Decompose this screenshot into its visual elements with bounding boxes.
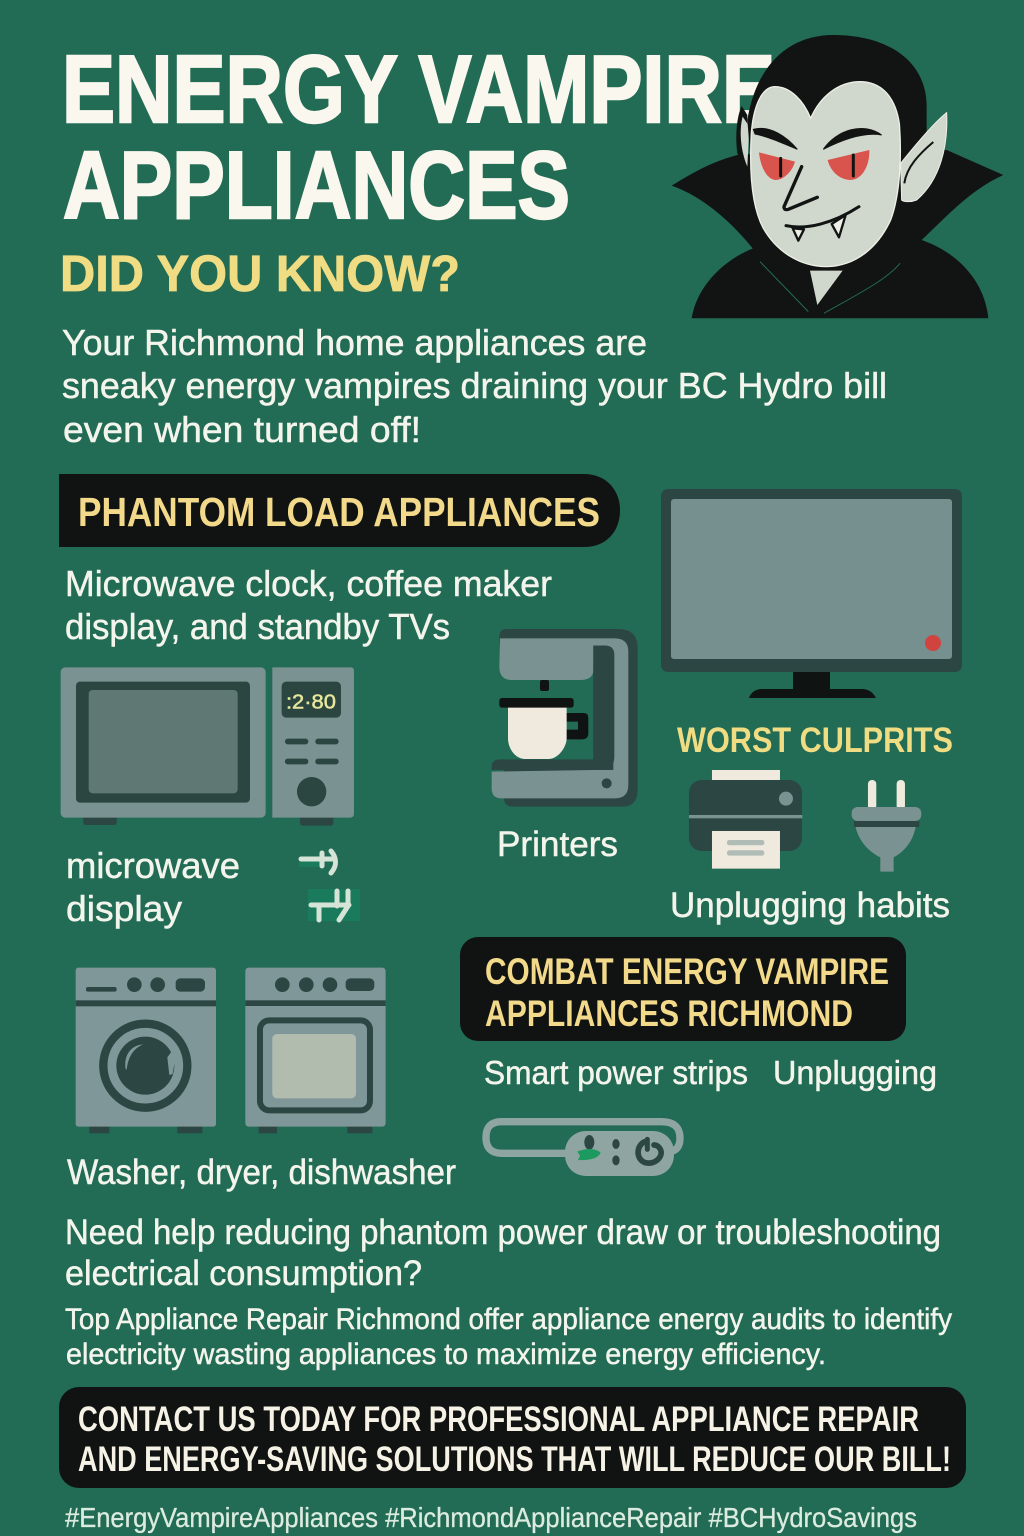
label: printers: Printers: [497, 825, 618, 864]
phantom load description: Microwave clock, coffee maker: [65, 563, 552, 604]
title: APPLIANCES: [63, 132, 570, 239]
label: unplugging habits: Unplugging habits: [670, 886, 950, 925]
microwave display label: microwave: [66, 845, 240, 886]
icon: printer: [689, 770, 802, 869]
title: [62, 36, 775, 239]
help question: Need help reducing phantom power draw or troubleshooting: [65, 1213, 941, 1252]
phantom load description: [65, 563, 552, 647]
service description: Top Appliance Repair Richmond offer appliance energy audits to identify: [65, 1303, 952, 1336]
phantom load description: display, and standby TVs: [65, 606, 450, 647]
icon: vampire: [672, 35, 1003, 318]
title: ENERGY VAMPIRE: [62, 36, 775, 143]
combat tips: Smart power strips: [484, 1054, 748, 1091]
icon: dryer: [245, 968, 386, 1133]
heading: did you know: DID YOU KNOW?: [60, 245, 460, 302]
icon: television: [661, 489, 962, 698]
intro text: even when turned off!: [63, 409, 421, 450]
panel: contact call to action: [59, 1387, 966, 1488]
icon: smart power strip: [486, 1122, 680, 1176]
icon: plug: [852, 780, 921, 872]
service description: electricity wasting appliances to maximize energy efficiency.: [66, 1338, 826, 1371]
microwave display label: display: [66, 888, 182, 929]
combat tips: [484, 1054, 937, 1091]
label: washer, dryer, dishwasher: Washer, dryer, dishwasher: [67, 1153, 456, 1192]
help question: electrical consumption?: [65, 1254, 422, 1293]
panel: combat energy vampire: [460, 937, 906, 1041]
intro text: sneaky energy vampires draining your BC Hydro bill: [62, 365, 887, 406]
intro text: Your Richmond home appliances are: [62, 322, 647, 363]
icon: microwave: [61, 667, 354, 826]
heading: worst culprits: WORST CULPRITS: [677, 721, 953, 760]
panel: combat energy vampire: COMBAT ENERGY VAMPIRE: [485, 951, 889, 992]
banner: phantom load appliances: PHANTOM LOAD APPLIANCES: [78, 489, 600, 535]
icon: washer: [76, 968, 216, 1133]
icon: small plug arrows: [299, 851, 360, 921]
intro text: [62, 322, 887, 450]
service description: [65, 1303, 952, 1371]
microwave display label: [66, 845, 240, 929]
hashtags: #EnergyVampireAppliances #RichmondApplianceRepair #BCHydroSavings: [65, 1502, 917, 1533]
banner: phantom load appliances: [59, 474, 620, 547]
panel: combat energy vampire: APPLIANCES RICHMOND: [485, 993, 853, 1034]
help question: [65, 1213, 941, 1293]
combat tips: Unplugging: [773, 1054, 937, 1091]
icon: microwave: :2·80: [286, 690, 336, 713]
icon: coffee maker: [492, 629, 638, 807]
